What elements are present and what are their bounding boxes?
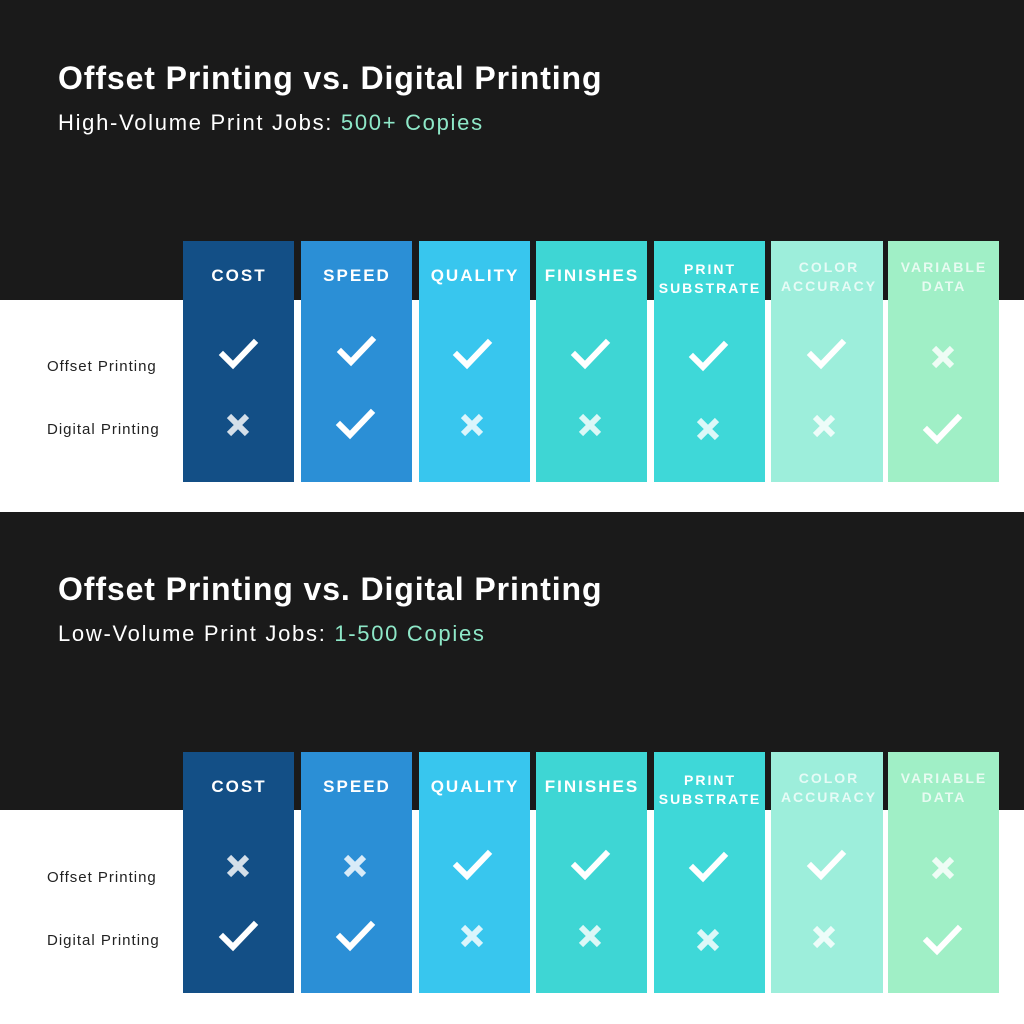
row labels: Digital Printing [47,932,160,949]
comparison columns: FINISHES [545,777,639,796]
comparison columns: VARIABLE [901,770,987,786]
comparison columns: DATA [922,278,966,294]
comparison columns: QUALITY [431,266,519,285]
comparison columns [183,752,999,993]
row labels [47,358,160,438]
comparison columns [183,241,999,482]
comparison columns: SPEED [323,777,391,796]
comparison columns: FINISHES [545,266,639,285]
section: low-volume [47,571,999,993]
section: high-volume [47,60,999,482]
comparison columns: VARIABLE [901,259,987,275]
comparison columns: DATA [922,789,966,805]
comparison columns: ACCURACY [781,789,877,805]
comparison columns: PRINT [684,772,736,788]
comparison columns: ACCURACY [781,278,877,294]
comparison columns: COLOR [799,259,859,275]
comparison columns: COST [211,777,267,796]
row labels: Digital Printing [47,421,160,438]
comparison columns: COST [211,266,267,285]
comparison columns: QUALITY [431,777,519,796]
row labels: Offset Printing [47,869,157,886]
subtitle: High-Volume Print Jobs: 500+ Copies [58,110,484,135]
subtitle: Low-Volume Print Jobs: 1-500 Copies [58,621,486,646]
comparison columns: SUBSTRATE [659,791,761,807]
title: Offset Printing vs. Digital Printing [58,571,602,607]
comparison columns: PRINT [684,261,736,277]
row labels [47,869,160,949]
comparison columns: SPEED [323,266,391,285]
row labels: Offset Printing [47,358,157,375]
comparison columns: COLOR [799,770,859,786]
comparison columns: SUBSTRATE [659,280,761,296]
title: Offset Printing vs. Digital Printing [58,60,602,96]
